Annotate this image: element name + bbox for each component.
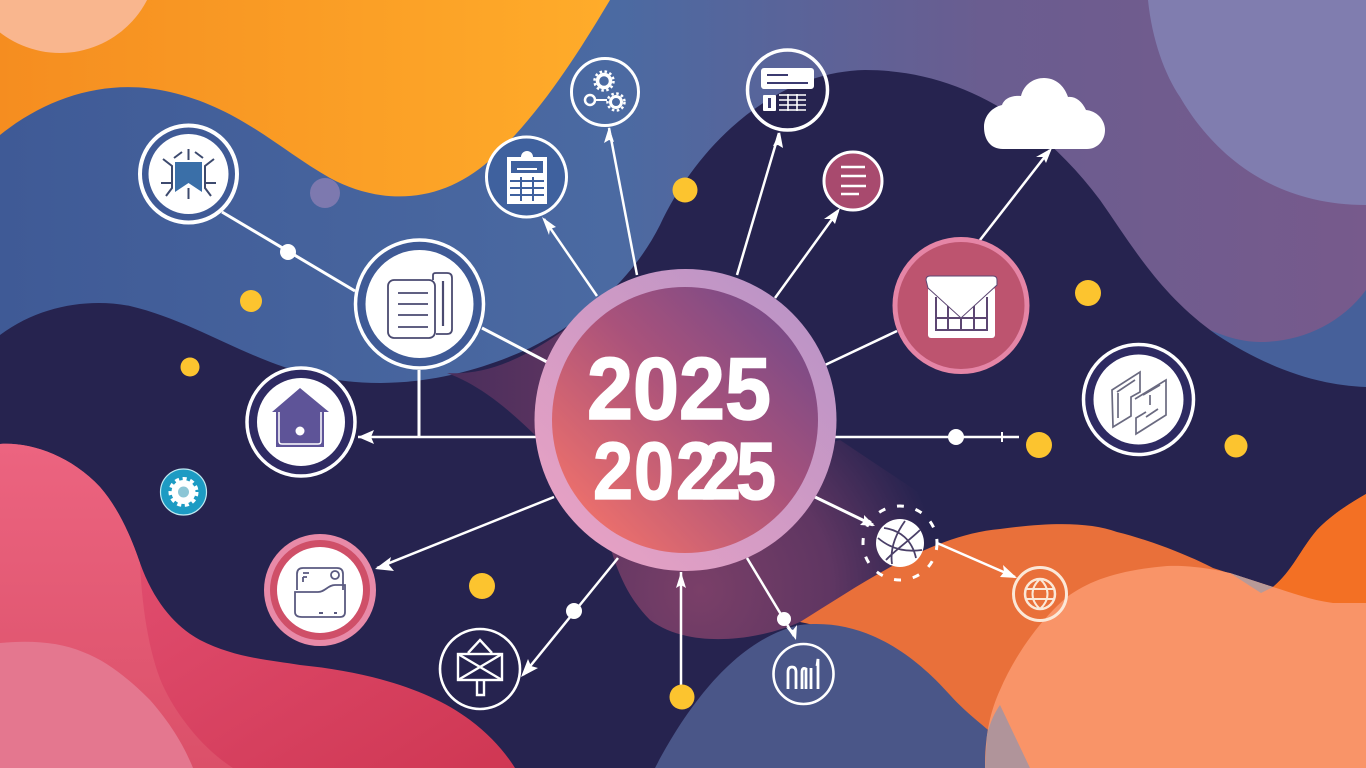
- node: document icon: [356, 240, 484, 368]
- heading: 20225: 20225: [593, 426, 776, 517]
- heading: 2025: 2025: [587, 339, 771, 438]
- icon: teal gear: [160, 469, 206, 515]
- icon: cloud: [984, 78, 1105, 149]
- node: list icon: [824, 152, 882, 210]
- accent dots: [180, 178, 1248, 710]
- node: dashed globe icon: [863, 506, 937, 580]
- node: card wallet icon: [267, 537, 373, 643]
- node: server icon: [748, 50, 828, 130]
- node: mail sign icon: [440, 629, 520, 709]
- node: envelope icon: [895, 240, 1027, 372]
- central hub: 2025: [534, 269, 836, 571]
- node: small globe icon: [1014, 568, 1066, 620]
- connector lines and arrows: [222, 127, 1052, 686]
- node: puzzle icon: [1084, 344, 1194, 454]
- node: gears icon: [572, 58, 638, 126]
- node: house icon: [247, 368, 355, 476]
- node: bar chart icon: [774, 644, 834, 704]
- node: clipboard icon: [486, 137, 566, 217]
- node: chip icon: [140, 126, 237, 222]
